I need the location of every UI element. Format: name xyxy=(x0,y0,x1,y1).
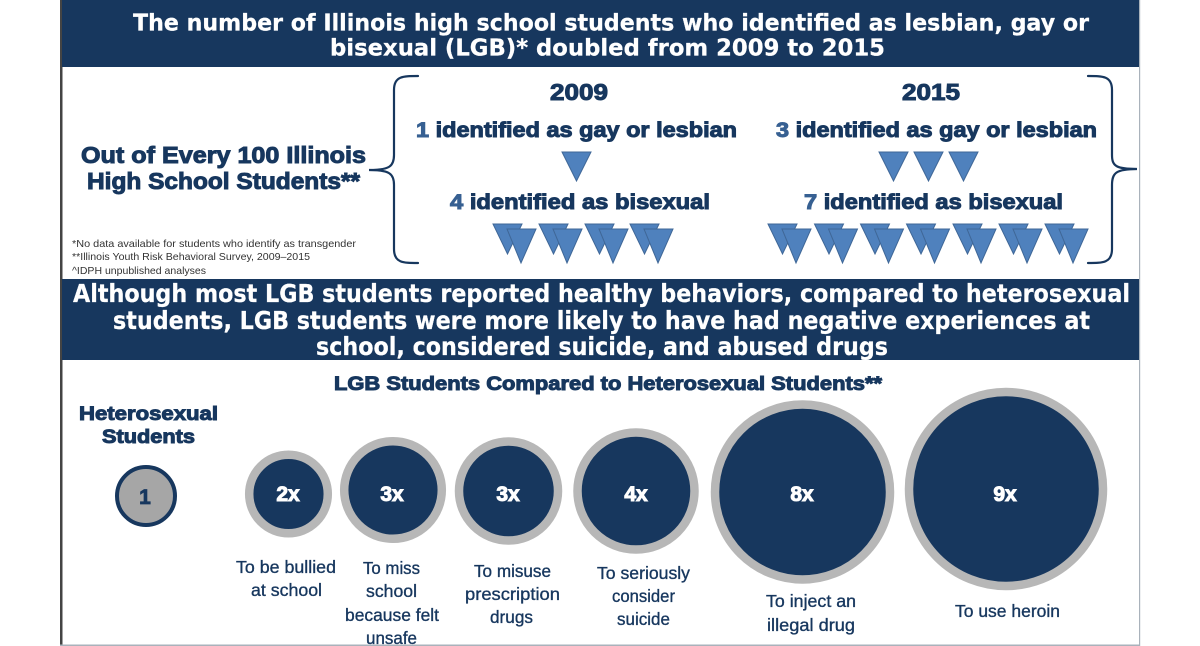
metric: 9x use heroin xyxy=(909,392,1103,621)
title banner: The number of Illinois high school students who identified as lesbian, gay or xyxy=(133,10,1090,36)
footnotes xyxy=(72,238,357,277)
heading: out of every 100 students xyxy=(81,142,366,194)
text: 7 identified as bisexual: 7 identified as bisexual xyxy=(804,190,1063,214)
title banner: bisexual (LGB)* doubled from 2009 to 2015 xyxy=(330,36,885,62)
caption: To inject an xyxy=(766,591,856,611)
metric: 8x inject illegal drug xyxy=(715,404,890,635)
caption: prescription xyxy=(465,584,560,604)
metric: 3x miss school: 3x xyxy=(380,483,404,506)
metric: 3x misuse prescription drugs: 3x xyxy=(496,483,520,506)
second banner: school, considered suicide, and abused drugs xyxy=(316,332,888,361)
label: heterosexual students: Heterosexual xyxy=(79,403,218,425)
left brace xyxy=(369,76,418,263)
text: 4 identified as bisexual: 4 identified as bisexual xyxy=(450,190,710,214)
icons: triangles 2015 bisexual xyxy=(768,224,1088,263)
second banner xyxy=(62,279,1139,361)
reference: heterosexual students xyxy=(79,403,218,525)
caption xyxy=(236,557,336,600)
right brace xyxy=(1088,76,1137,263)
caption xyxy=(597,563,690,629)
caption: at school xyxy=(251,580,322,600)
metric: 4x consider suicide: 4x xyxy=(624,483,648,506)
metric: 9x use heroin: 9x xyxy=(993,483,1017,506)
caption: To seriously xyxy=(597,563,690,583)
footnotes: *No data available for students who identify as transgender xyxy=(72,238,357,250)
label: heterosexual students xyxy=(79,403,218,448)
text: 3 identified as gay or lesbian: 3 identified as gay or lesbian xyxy=(776,118,1097,142)
year heading 2015: 2015 xyxy=(902,79,960,105)
heading: out of every 100 students: Out of Every 100 Illinois xyxy=(81,142,366,168)
icons: triangles 2009 bisexual xyxy=(493,224,673,263)
year heading 2009: 2009 xyxy=(550,79,608,105)
caption xyxy=(766,591,856,635)
panel: 2015 xyxy=(768,79,1097,263)
footnotes: **Illinois Youth Risk Behavioral Survey, 2009–2015 xyxy=(72,251,310,263)
caption: To misuse xyxy=(474,561,551,581)
second banner: students, LGB students were more likely to have had negative experiences at xyxy=(113,306,1090,335)
caption: school xyxy=(366,581,417,601)
panel: 2009 xyxy=(416,79,737,263)
caption: To miss xyxy=(363,558,420,578)
metric: 2x bullied xyxy=(236,455,336,600)
caption: To use heroin xyxy=(955,601,1060,621)
metric: 8x inject illegal drug: 8x xyxy=(790,483,814,506)
metric: 3x miss school xyxy=(344,441,442,646)
title banner xyxy=(62,0,1139,67)
caption xyxy=(465,561,560,627)
caption: because felt xyxy=(345,605,439,625)
heading: out of every 100 students: High School Students** xyxy=(87,168,360,194)
label: heterosexual students: Students xyxy=(102,426,195,448)
circle: 1: 1 xyxy=(139,486,151,509)
metric: 2x bullied: 2x xyxy=(276,483,300,506)
caption: suicide xyxy=(617,609,670,629)
metric: 4x consider suicide xyxy=(578,432,694,629)
text: 1 identified as gay or lesbian: 1 identified as gay or lesbian xyxy=(416,118,737,142)
icon: triangle 2009 gay or lesbian xyxy=(562,152,591,181)
icons: triangles 2015 gay or lesbian xyxy=(879,152,978,181)
caption: illegal drug xyxy=(767,615,855,635)
caption: drugs xyxy=(490,607,533,627)
caption xyxy=(345,558,439,646)
metric: 3x misuse prescription drugs xyxy=(459,442,560,627)
caption: To be bullied xyxy=(236,557,336,577)
footnotes: ^IDPH unpublished analyses xyxy=(72,265,206,277)
caption: consider xyxy=(612,586,675,606)
chart subtitle: LGB Students Compared to Heterosexual Students** xyxy=(334,374,883,395)
